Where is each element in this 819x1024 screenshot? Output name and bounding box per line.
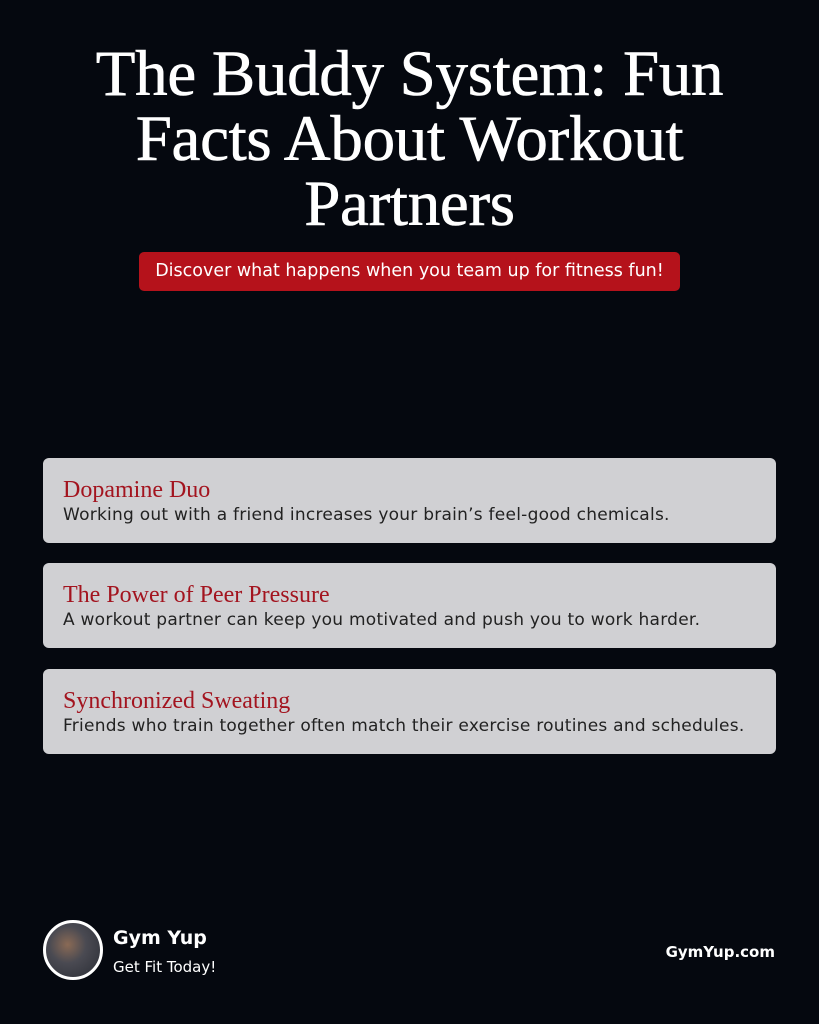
title: Facts About Workout — [136, 103, 683, 175]
card: dopamine duo — [43, 458, 776, 543]
card: synchronized sweating — [43, 669, 776, 754]
subtitle banner: Discover what happens when you team up for fitness fun! — [155, 261, 664, 281]
card: synchronized sweating: Synchronized Sweating — [63, 688, 290, 714]
subtitle banner — [139, 252, 680, 291]
card: peer pressure: The Power of Peer Pressure — [63, 582, 330, 608]
title: The Buddy System: Fun — [96, 38, 723, 110]
tagline: Get Fit Today! — [113, 958, 216, 976]
card: dopamine duo: Dopamine Duo — [63, 477, 210, 503]
icon: avatar — [43, 920, 103, 980]
website: GymYup.com — [666, 943, 775, 961]
brand name: Gym Yup — [113, 927, 207, 949]
title: Partners — [304, 168, 515, 240]
card: dopamine duo: Working out with a friend increases your brain’s feel-good chemicals. — [63, 505, 670, 525]
title — [96, 38, 723, 240]
card: peer pressure: A workout partner can keep you motivated and push you to work harder. — [63, 610, 700, 630]
card: peer pressure — [43, 563, 776, 648]
card: synchronized sweating: Friends who train together often match their exercise routines and schedules. — [63, 716, 744, 736]
